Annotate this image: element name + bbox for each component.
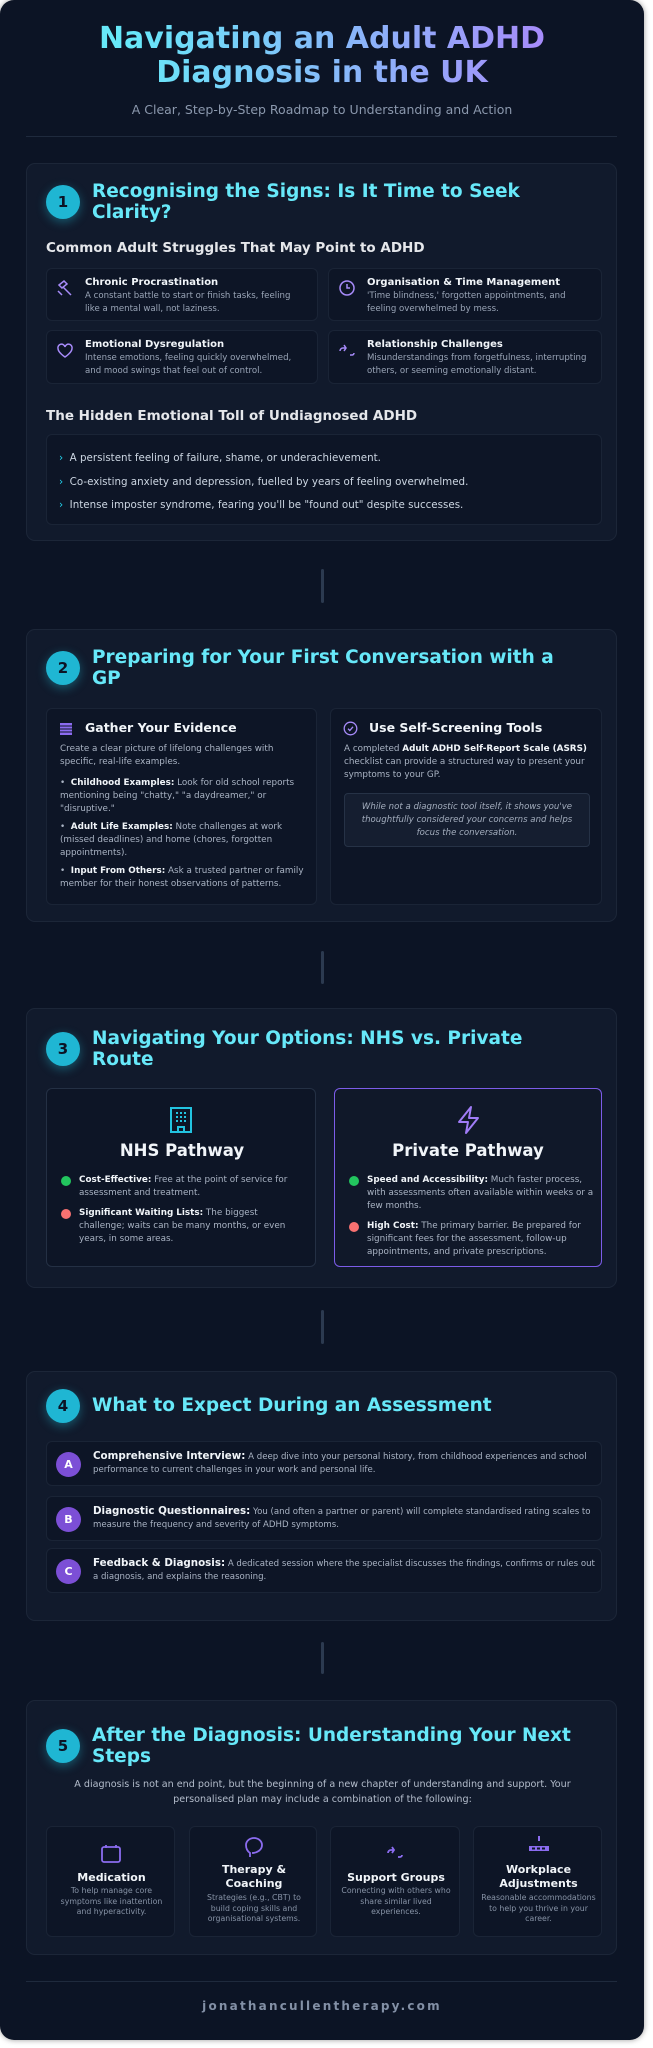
icon: heart <box>57 343 73 358</box>
number badge 5: 5 <box>58 1737 68 1755</box>
list box: › Co-existing anxiety and depression, fuelled by years of feeling overwhelmed. <box>59 476 468 488</box>
title <box>0 22 644 90</box>
card: organisation: 'Time blindness,' forgotten appointments, and feeling overwhelmed by mess. <box>367 291 566 314</box>
card: gather evidence: • Childhood Examples: Look for old school reports mentioning being "chatty," "a daydreamer," or "disruptive." <box>60 778 294 814</box>
card: Private: High Cost: The primary barrier. Be prepared for significant fees for the assessment, follow-up appointments, and private prescriptions. <box>367 1221 581 1257</box>
card: procrastination: A constant battle to start or finish tasks, feeling like a mental wall, not laziness. <box>85 291 290 314</box>
panel: section 2 <box>26 629 617 922</box>
number badge 2: 2 <box>58 659 68 677</box>
callout note <box>344 793 590 847</box>
icon: arrows <box>339 344 355 356</box>
heading 3: Navigating Your Options: NHS vs. Private Route <box>92 1028 522 1070</box>
step B: Diagnostic Questionnaires: You (and often a partner or parent) will complete standardised rating scales to measure the frequency and severity of ADHD symptoms. <box>93 1505 591 1530</box>
card: medication: To help manage core symptoms like inattention and hyperactivity. <box>61 1886 162 1916</box>
card: organisation: Organisation & Time Management <box>367 277 560 288</box>
subheading struggles: Common Adult Struggles That May Point to ADHD <box>46 240 425 256</box>
card: self-screening: A completed Adult ADHD Self-Report Scale (ASRS) checklist can provide a structured way to present your symptoms to your GP. <box>344 744 587 780</box>
subtitle: A Clear, Step-by-Step Roadmap to Understanding and Action <box>132 102 512 117</box>
card: workplace: Adjustments <box>499 1877 578 1890</box>
card: gather evidence: • Input From Others: Ask a trusted partner or family member for their honest observations of patterns. <box>60 866 304 889</box>
step B: B <box>64 1513 73 1526</box>
card: workplace: Reasonable accommodations to help you thrive in your career. <box>481 1893 596 1923</box>
card: emotional: Emotional Dysregulation <box>85 339 224 350</box>
list box <box>46 434 602 525</box>
icon: check circle <box>344 722 358 736</box>
step A: Comprehensive Interview: A deep dive into your personal history, from childhood experiences and school performance to current challenges in your work and personal life. <box>93 1450 587 1474</box>
card: therapy <box>189 1826 317 1937</box>
card: support groups <box>330 1826 460 1937</box>
icon: hammer <box>58 280 72 296</box>
footer: jonathancullentherapy.com <box>202 1999 442 2013</box>
card: Private <box>334 1088 602 1267</box>
list box: › Intense imposter syndrome, fearing you'll be "found out" despite successes. <box>59 499 463 511</box>
icon: document <box>60 723 72 735</box>
step A: A <box>64 1458 73 1471</box>
heading 1: Recognising the Signs: Is It Time to Seek Clarity? <box>92 181 520 223</box>
card: NHS: Significant Waiting Lists: The biggest challenge; waits can be many months, or even years, in some areas. <box>79 1208 285 1244</box>
icon: lightning <box>458 1106 479 1134</box>
panel: section 4 <box>26 1371 617 1621</box>
card: gather evidence: Gather Your Evidence <box>85 720 237 735</box>
card: self-screening <box>330 708 602 905</box>
card: organisation <box>328 268 602 321</box>
number badge 4: 4 <box>58 1397 68 1415</box>
card: workplace <box>473 1826 602 1937</box>
number badge 2 <box>46 651 80 685</box>
panel: section 1 <box>26 163 617 541</box>
intro text: A diagnosis is not an end point, but the beginning of a new chapter of understanding and support. Your personalised plan may include a combination of the following: <box>74 1779 571 1804</box>
heading 5: After the Diagnosis: Understanding Your Next Steps <box>92 1725 571 1767</box>
step C: C <box>64 1565 73 1578</box>
heading 2: Preparing for Your First Conversation with a GP <box>92 647 554 689</box>
card: procrastination <box>46 268 318 321</box>
card: therapy: Strategies (e.g., CBT) to build coping skills and organisational systems. <box>207 1893 301 1923</box>
panel: section 5 <box>26 1700 617 1955</box>
card: relationship: Relationship Challenges <box>367 339 503 350</box>
number badge 1 <box>46 185 80 219</box>
callout note: While not a diagnostic tool itself, it shows you've thoughtfully considered your concerns and helps focus the conversation. <box>362 802 572 838</box>
icon: calendar <box>101 1845 121 1863</box>
card: medication <box>46 1826 175 1937</box>
number badge 3: 3 <box>58 1040 68 1058</box>
title: Diagnosis in the UK <box>156 55 488 90</box>
card: gather evidence <box>46 708 317 905</box>
card: NHS <box>46 1088 316 1267</box>
card: support groups: Support Groups <box>347 1871 445 1884</box>
card: gather evidence: Create a clear picture of lifelong challenges with specific, real-life examples. <box>60 744 273 767</box>
step A <box>46 1441 602 1486</box>
number badge 5 <box>46 1729 80 1763</box>
card: relationship: Misunderstandings from forgetfulness, interrupting others, or seeming emotionally distant. <box>367 353 586 376</box>
card: procrastination: Chronic Procrastination <box>85 277 218 288</box>
panel: section 3 <box>26 1008 617 1288</box>
icon: building <box>170 1107 192 1133</box>
subheading emotional toll: The Hidden Emotional Toll of Undiagnosed ADHD <box>46 408 417 424</box>
card: emotional <box>46 330 318 384</box>
number badge 3 <box>46 1032 80 1066</box>
icon: head <box>245 1837 263 1857</box>
card: support groups: Connecting with others who share similar lived experiences. <box>341 1886 451 1916</box>
card: NHS: Cost-Effective: Free at the point of service for assessment and treatment. <box>79 1175 287 1198</box>
step C: Feedback & Diagnosis: A dedicated session where the specialist discusses the findings, confirms or rules out a diagnosis, and explains the reasoning. <box>93 1557 595 1582</box>
card: therapy: Coaching <box>226 1877 282 1890</box>
card: medication: Medication <box>77 1871 146 1884</box>
step C <box>46 1548 602 1593</box>
icon: desk <box>529 1836 549 1851</box>
card: gather evidence: • Adult Life Examples: Note challenges at work (missed deadlines) and home (chores, forgotten appointments). <box>60 822 282 858</box>
number badge 1: 1 <box>58 193 68 211</box>
card: workplace: Workplace <box>506 1863 571 1876</box>
card: relationship <box>328 330 602 384</box>
icon: arrows <box>387 1846 403 1858</box>
title: Navigating an Adult ADHD <box>99 21 545 56</box>
list box: › A persistent feeling of failure, shame, or underachievement. <box>59 452 381 464</box>
heading 4: What to Expect During an Assessment <box>92 1395 492 1416</box>
card: therapy: Therapy & <box>222 1863 286 1876</box>
number badge 4 <box>46 1389 80 1423</box>
card: Private: Private Pathway <box>392 1141 544 1160</box>
card: self-screening: Use Self-Screening Tools <box>369 720 542 735</box>
step B <box>46 1496 602 1541</box>
card: Private: Speed and Accessibility: Much faster process, with assessments often available within weeks or a few months. <box>367 1175 593 1211</box>
icon: clock <box>339 280 355 296</box>
card: emotional: Intense emotions, feeling quickly overwhelmed, and mood swings that feel out of control. <box>85 353 291 376</box>
card: NHS: NHS Pathway <box>120 1141 244 1160</box>
